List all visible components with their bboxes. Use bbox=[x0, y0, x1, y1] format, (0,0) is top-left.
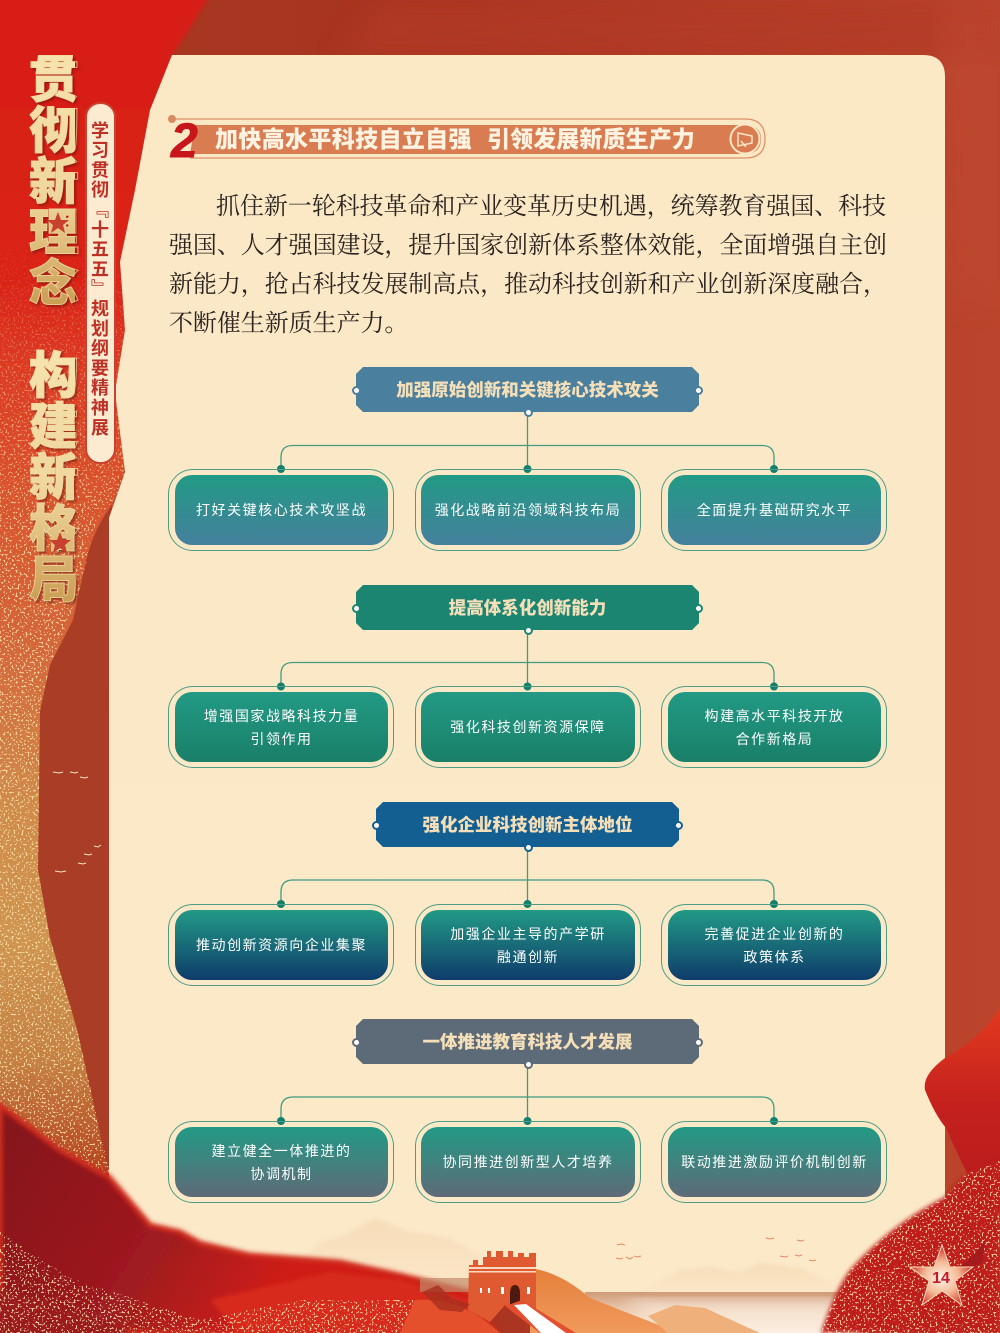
pale distant mountains right bbox=[640, 1263, 850, 1292]
bottom gold speckle band bbox=[0, 1232, 480, 1333]
card: 推动创新资源向企业集聚: 推动创新资源向企业集聚 bbox=[196, 937, 367, 953]
intro paragraph: 新能力，抢占科技发展制高点，推动科技创新和产业创新深度融合， bbox=[169, 272, 887, 298]
right gold hill bbox=[821, 1160, 1000, 1333]
card: 强化科技创新资源保障: 强化科技创新资源保障 bbox=[450, 719, 606, 735]
card: 增强国家战略科技力量引领作用: 引领作用 bbox=[250, 730, 313, 746]
card: 强化科技创新资源保障 bbox=[415, 686, 641, 768]
header: 提高体系化创新能力 bbox=[352, 585, 703, 635]
card: 构建高水平科技开放合作新格局 bbox=[661, 686, 887, 768]
card: 全面提升基础研究水平: 全面提升基础研究水平 bbox=[697, 502, 852, 518]
card: 增强国家战略科技力量引领作用: 增强国家战略科技力量 bbox=[204, 708, 359, 724]
card: 建立健全一体推进的协调机制: 建立健全一体推进的 bbox=[212, 1142, 351, 1158]
card: 协同推进创新型人才培养: 协同推进创新型人才培养 bbox=[442, 1154, 614, 1170]
card: 打好关键核心技术攻坚战: 打好关键核心技术攻坚战 bbox=[196, 502, 367, 518]
connectors: group 2 bbox=[277, 634, 778, 690]
mist and sea bbox=[585, 1292, 860, 1333]
card: 强化战略前沿领域科技布局 bbox=[415, 469, 641, 551]
header: 一体推进教育科技人才发展 bbox=[352, 1019, 703, 1069]
header: 加强原始创新和关键核心技术攻关: 加强原始创新和关键核心技术攻关 bbox=[396, 380, 659, 400]
pale distant mountain left of tower bbox=[290, 1218, 480, 1292]
great wall tower bbox=[422, 1251, 576, 1333]
intro paragraph: 不断催生新质生产力。 bbox=[169, 311, 408, 337]
card: 构建高水平科技开放合作新格局: 构建高水平科技开放 bbox=[705, 708, 844, 724]
intro paragraph: 强国、人才强国建设，提升国家创新体系整体效能，全面增强自主创 bbox=[169, 233, 887, 259]
bank behind tower bbox=[420, 1278, 480, 1292]
section heading bar: 引领发展新质生产力 bbox=[487, 126, 695, 152]
card: 增强国家战略科技力量引领作用 bbox=[168, 686, 394, 768]
section heading bar bbox=[168, 115, 766, 164]
bottom-left dark red drape bbox=[0, 1105, 480, 1333]
brown hollow in the left column bbox=[38, 505, 112, 1170]
card: 打好关键核心技术攻坚战 bbox=[168, 469, 394, 551]
title: 构建新格局: 构建新格局 bbox=[22, 349, 78, 604]
birds bbox=[616, 1238, 816, 1261]
intro paragraph: 抓住新一轮科技革命和产业变革历史机遇，统筹教育强国、科技 bbox=[216, 194, 886, 220]
title star accents bbox=[47, 212, 71, 553]
subtitle text: 学习贯彻『十五五』规划纲要精神展 bbox=[89, 121, 109, 438]
header: 强化企业科技创新主体地位 bbox=[372, 802, 683, 852]
page number star: 14 bbox=[932, 1270, 950, 1287]
header: 强化企业科技创新主体地位: 强化企业科技创新主体地位 bbox=[422, 815, 632, 835]
card: 强化战略前沿领域科技布局: 强化战略前沿领域科技布局 bbox=[435, 502, 621, 518]
card: 建立健全一体推进的协调机制 bbox=[168, 1121, 394, 1203]
card: 联动推进激励评价机制创新 bbox=[661, 1121, 887, 1203]
connectors: group 1 bbox=[277, 416, 778, 473]
left hill foot bbox=[400, 1300, 500, 1333]
card: 加强企业主导的产学研融通创新 bbox=[415, 904, 641, 986]
section heading bar: 加快高水平科技自立自强 bbox=[215, 126, 472, 152]
card: 构建高水平科技开放合作新格局: 合作新格局 bbox=[736, 730, 813, 746]
subtitle pill bbox=[85, 102, 116, 464]
card: 完善促进企业创新的政策体系 bbox=[661, 904, 887, 986]
card: 协同推进创新型人才培养 bbox=[415, 1121, 641, 1203]
intro paragraph bbox=[169, 194, 887, 337]
page number star bbox=[908, 1240, 985, 1306]
left red-to-gold swoosh bbox=[0, 0, 212, 1170]
cream panel bbox=[109, 55, 945, 1300]
connectors: group 4 bbox=[277, 1068, 778, 1125]
card: 推动创新资源向企业集聚 bbox=[168, 904, 394, 986]
right red blob bbox=[925, 1007, 1000, 1210]
title: 贯彻新理念: 贯彻新理念 bbox=[22, 53, 78, 308]
gold speckle over swoosh bbox=[0, 230, 150, 1230]
bright red terraced hill bbox=[210, 1272, 500, 1333]
header: 提高体系化创新能力: 提高体系化创新能力 bbox=[449, 598, 606, 618]
card: 加强企业主导的产学研融通创新: 加强企业主导的产学研 bbox=[450, 926, 606, 942]
card: 加强企业主导的产学研融通创新: 融通创新 bbox=[497, 948, 559, 964]
card: 完善促进企业创新的政策体系: 政策体系 bbox=[743, 948, 806, 964]
card: 联动推进激励评价机制创新: 联动推进激励评价机制创新 bbox=[681, 1154, 868, 1170]
header: 一体推进教育科技人才发展: 一体推进教育科技人才发展 bbox=[422, 1032, 632, 1052]
card: 建立健全一体推进的协调机制: 协调机制 bbox=[250, 1166, 313, 1182]
card: 完善促进企业创新的政策体系: 完善促进企业创新的 bbox=[705, 926, 844, 942]
orange mountain bbox=[530, 1268, 680, 1333]
connectors: group 3 bbox=[277, 852, 778, 908]
header: 加强原始创新和关键核心技术攻关 bbox=[352, 367, 703, 417]
card: 全面提升基础研究水平 bbox=[661, 469, 887, 551]
